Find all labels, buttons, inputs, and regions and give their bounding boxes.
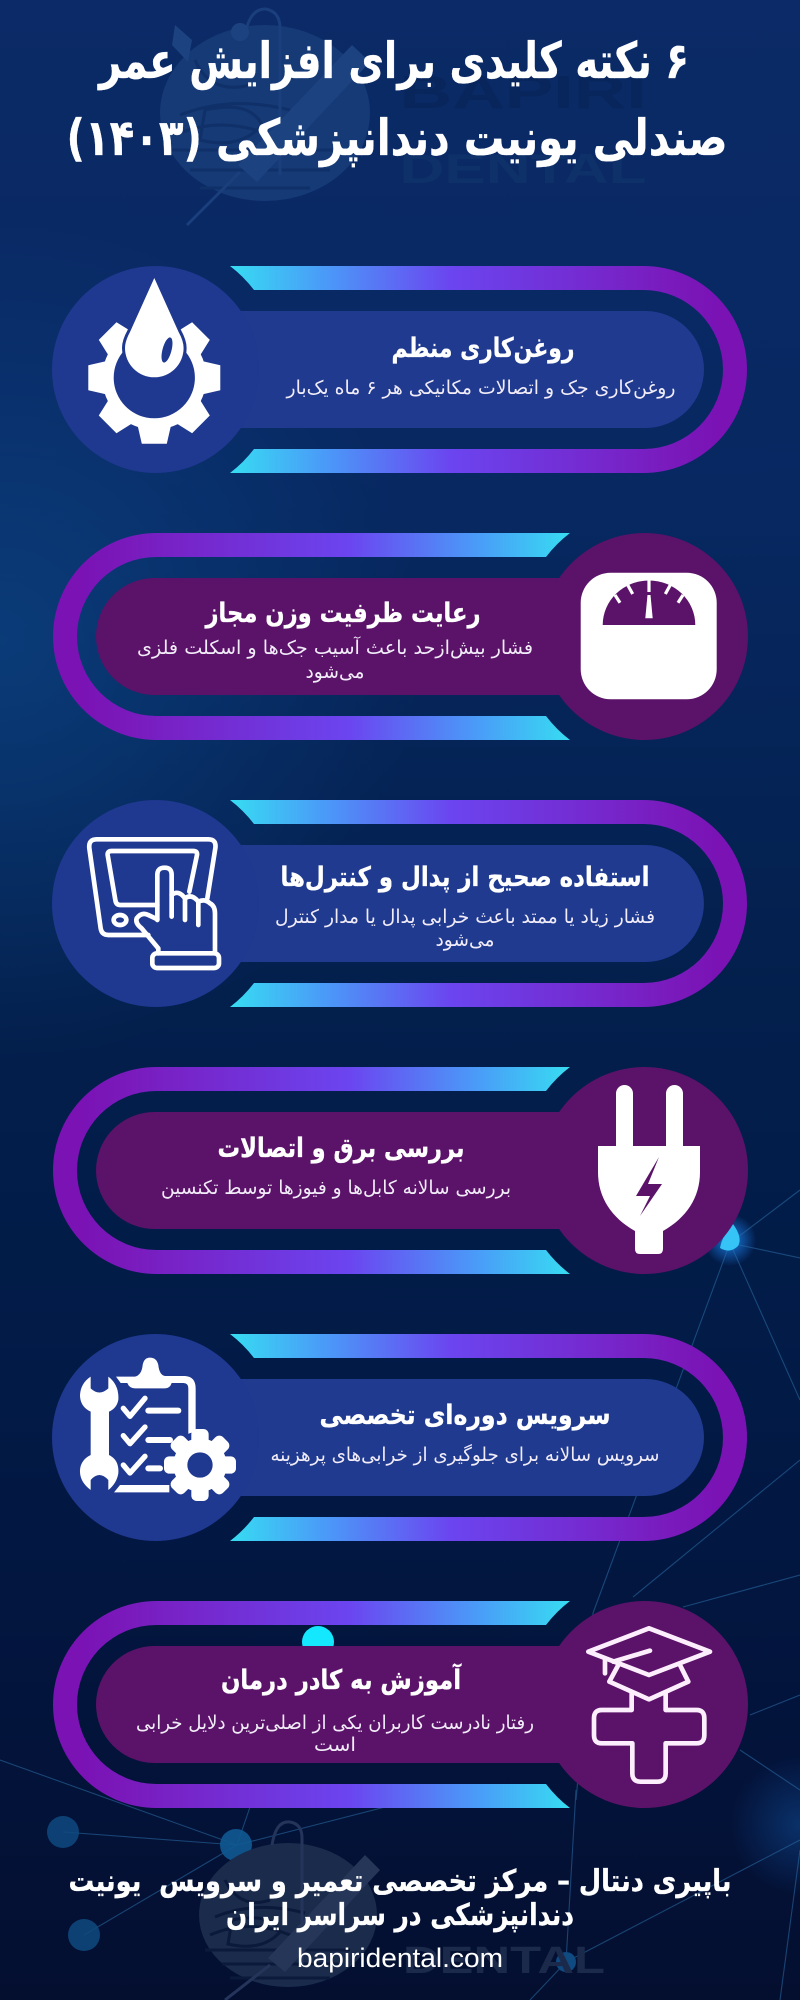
- ring: [53, 1067, 570, 1274]
- icon: weighing scale: [581, 573, 717, 699]
- panel: periodic service: [52, 1334, 747, 1541]
- card body: [96, 1646, 645, 1763]
- ring: [230, 266, 747, 473]
- icon: wrench, checklist and gear: [80, 1358, 236, 1501]
- description: [136, 1712, 534, 1756]
- description: است: [314, 1734, 356, 1756]
- description: می‌شود: [306, 661, 364, 683]
- heading: بررسی برق و اتصالات: [218, 1133, 464, 1164]
- circle: [541, 1601, 748, 1808]
- watermark wordmark: top: [400, 66, 646, 192]
- card body: [96, 578, 645, 695]
- icon: oil drop and gear: [88, 278, 220, 444]
- description: بررسی سالانه کابل‌ها و فیوزها توسط تکنسین: [161, 1177, 511, 1199]
- heading: سرویس دوره‌ای تخصصی: [320, 1400, 610, 1431]
- ring: [230, 1334, 747, 1541]
- panel: weight capacity: [53, 533, 748, 740]
- heading: استفاده صحیح از پدال و کنترل‌ها: [280, 862, 650, 893]
- panel: electrical check: [53, 1067, 748, 1274]
- description: فشار بیش‌ازحد باعث آسیب جک‌ها و اسکلت فلزی: [137, 635, 533, 659]
- circle: [541, 1067, 748, 1274]
- watermark logo: footer: [199, 1822, 380, 2000]
- icon: graduation cap and medical cross: [588, 1628, 710, 1782]
- card body: [155, 1379, 704, 1496]
- watermark logo: top: [160, 9, 370, 225]
- watermark wordmark: top: DENTAL: [400, 145, 646, 192]
- heading: روغن‌کاری منظم: [392, 333, 574, 364]
- description: فشار زیاد یا ممتد باعث خرابی پدال یا مدار کنترل: [275, 906, 655, 928]
- circle: [541, 533, 748, 740]
- ring: [53, 1601, 570, 1808]
- circle: [52, 1334, 259, 1541]
- description: [275, 906, 655, 951]
- title: [66, 32, 728, 168]
- footer text: [68, 1864, 732, 1933]
- description: می‌شود: [436, 929, 494, 951]
- icon: power plug: [598, 1085, 700, 1254]
- description: سرویس سالانه برای جلوگیری از خرابی‌های پرهزینه: [270, 1443, 660, 1466]
- website url: bapiridental.com: [297, 1943, 503, 1973]
- panel: staff training: [53, 1601, 748, 1808]
- card body: [96, 1112, 645, 1229]
- description: [137, 635, 533, 683]
- circle: [52, 266, 259, 473]
- description: رفتار نادرست کاربران یکی از اصلی‌ترین دلایل خرابی: [136, 1712, 534, 1734]
- icon: hand on control panel: [89, 839, 219, 968]
- watermark wordmark: footer: DENTAL: [403, 1940, 605, 1982]
- ring: [230, 800, 747, 1007]
- ring: [53, 533, 570, 740]
- background network lines and nodes: [0, 1190, 800, 2000]
- description: روغن‌کاری جک و اتصالات مکانیکی هر ۶ ماه یک‌بار: [286, 377, 676, 399]
- watermark wordmark: top: BAPIRI: [400, 66, 646, 118]
- panel: regular lubrication: [52, 266, 747, 473]
- heading: آموزش به کادر درمان: [221, 1663, 462, 1696]
- footer text: دندانپزشکی در سراسر ایران: [226, 1898, 574, 1933]
- card body: [155, 845, 704, 962]
- heading: رعایت ظرفیت وزن مجاز: [204, 598, 480, 629]
- panel: pedals and controls: [52, 800, 747, 1007]
- circle: [52, 800, 259, 1007]
- card body: [155, 311, 704, 428]
